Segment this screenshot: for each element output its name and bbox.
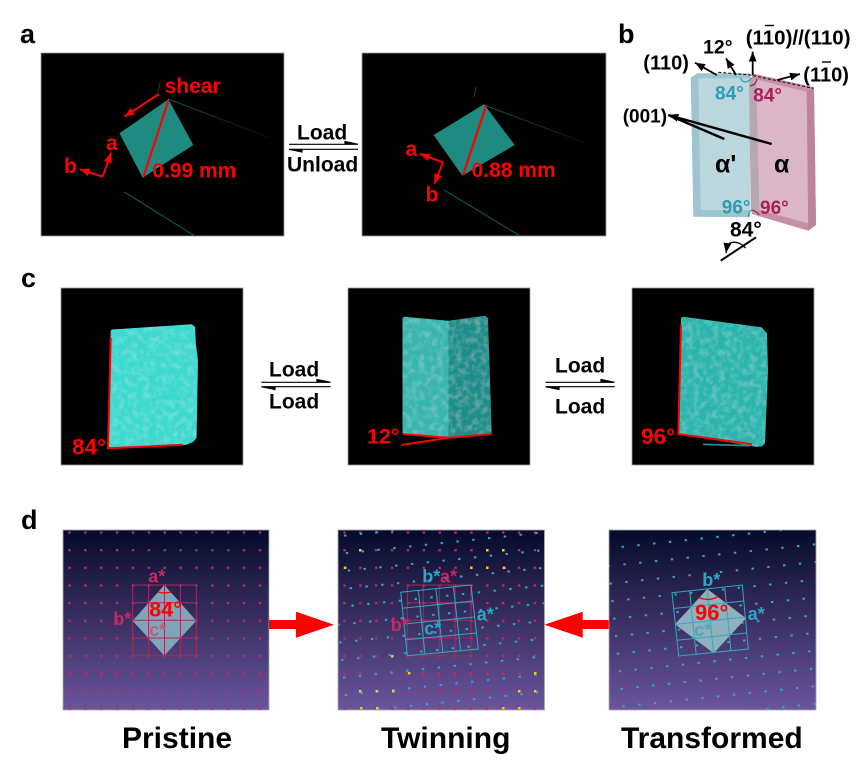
diffraction: transformed: c* <box>694 620 711 640</box>
image: crystal before load <box>41 53 284 236</box>
diffraction: twinning: b* <box>422 566 440 586</box>
angle labels <box>715 83 789 219</box>
diffraction: transformed: 96° <box>695 600 728 625</box>
angle labels: 84° <box>715 83 744 104</box>
phase labels: α <box>774 151 790 179</box>
load unload arrows <box>287 122 358 176</box>
diffraction: transformed: a* <box>748 604 765 624</box>
caption: Transformed: Transformed <box>621 722 803 755</box>
panel c <box>21 263 814 465</box>
load arrows right <box>545 354 615 418</box>
diffraction: pristine: c* <box>149 620 166 640</box>
load unload arrows: Load <box>297 122 347 144</box>
angle labels: 84° <box>753 86 782 107</box>
image: crystal 96 degrees <box>632 288 814 465</box>
measurement 0.99 mm: 0.99 mm <box>152 160 236 182</box>
plane labels: 12° <box>703 36 732 58</box>
rotation axis 84 degrees: 84° <box>730 219 762 242</box>
image: twinned crystal 12 degrees: 12° <box>367 424 400 448</box>
direction arrows <box>695 52 800 80</box>
yellow spots <box>344 549 536 710</box>
shear arrow and label <box>124 75 221 117</box>
image: crystal 96 degrees: 96° <box>641 424 675 449</box>
angle arcs <box>740 78 759 217</box>
diffraction: pristine: 84° <box>149 598 182 622</box>
arrow left <box>544 612 609 638</box>
angle labels: 96° <box>760 198 789 219</box>
caption: Twinning: Twinning <box>381 722 510 755</box>
diffraction: twinning: b* <box>391 615 409 635</box>
image: crystal after load <box>362 53 606 236</box>
diffraction: transformed: b* <box>702 570 720 590</box>
diffraction: pristine <box>63 530 269 710</box>
panel a <box>20 19 606 236</box>
phase labels <box>715 151 790 179</box>
plane labels <box>623 26 851 128</box>
panel letter a: a <box>20 19 36 49</box>
arrow right <box>269 612 334 638</box>
axes a and b: a <box>106 132 118 155</box>
axes a and b <box>64 132 118 178</box>
load arrows left <box>261 359 331 413</box>
panel letter b: b <box>618 19 634 49</box>
image: twinned crystal 12 degrees <box>348 288 530 465</box>
diffraction: twinning: c* <box>424 618 441 638</box>
load arrows left: Load <box>269 359 319 382</box>
angle labels: 96° <box>722 197 750 218</box>
plane labels: (110) <box>643 52 689 74</box>
diffraction: twinning: a* <box>477 605 494 625</box>
caption: Pristine: Pristine <box>122 722 232 755</box>
axes a and b: a <box>406 138 418 161</box>
load arrows right: Load <box>555 354 605 377</box>
plane labels: (001) <box>623 107 667 128</box>
image: crystal 84 degrees <box>61 288 243 465</box>
(001) arrows <box>668 115 772 144</box>
diffraction: transformed <box>609 530 816 710</box>
diffraction: pristine: b* <box>113 609 131 629</box>
panel b <box>618 19 851 261</box>
image: crystal 84 degrees: 84° <box>72 434 106 459</box>
load unload arrows: Unload <box>287 154 358 176</box>
plane labels: (110) <box>803 65 849 87</box>
diffraction: twinning: a* <box>440 566 457 586</box>
twin crystal schematic <box>691 72 816 231</box>
axes a and b: b <box>426 184 438 207</box>
axes a and b <box>406 138 443 207</box>
diffraction: twinning <box>338 530 544 710</box>
panel d <box>21 505 816 755</box>
panel letter d: d <box>21 505 38 535</box>
measurement 0.88 mm: 0.88 mm <box>472 159 556 182</box>
load arrows left: Load <box>269 390 319 413</box>
axes a and b: b <box>64 155 77 178</box>
plane labels: (110)//(110) <box>746 26 851 49</box>
diffraction: pristine: a* <box>148 566 165 586</box>
load arrows right: Load <box>555 395 605 418</box>
rotation axis 84 degrees <box>721 219 762 261</box>
panel letter c: c <box>21 263 36 293</box>
shear arrow and label: shear <box>165 75 221 98</box>
phase labels: α' <box>715 151 736 179</box>
